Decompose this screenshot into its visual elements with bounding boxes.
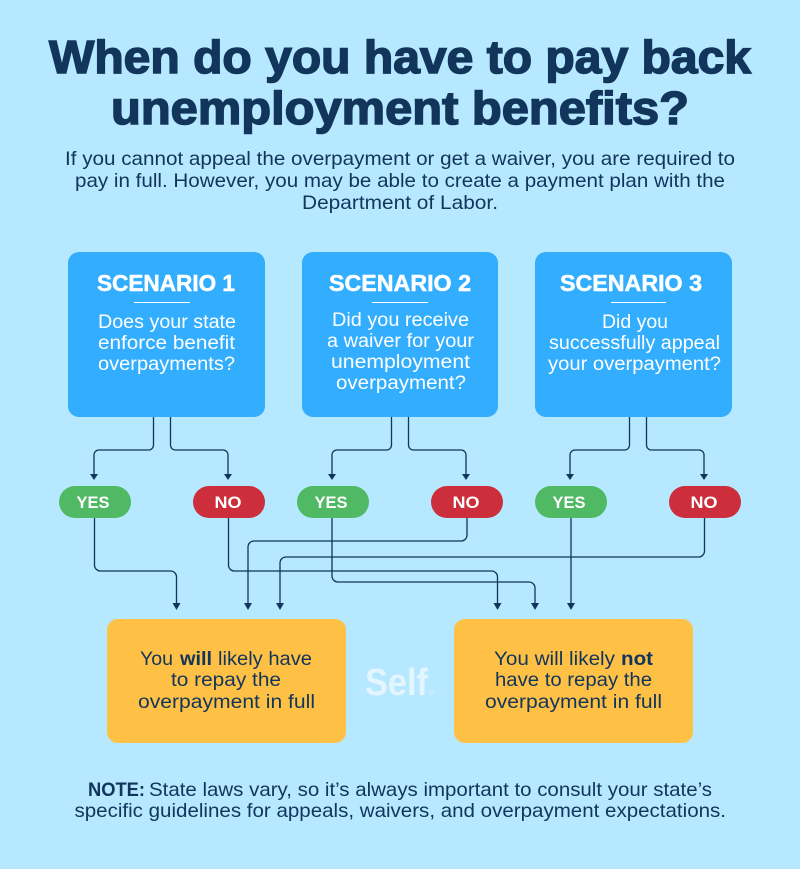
panel: scenario 2: unemployment [331,352,471,373]
outcome: will likely repay: to repay the [171,670,281,691]
outcome: will likely repay: overpayment in full [138,692,315,713]
outcome: will likely not repay: You will likely [494,649,616,670]
panel: scenario 3: successfully appeal [549,333,720,354]
outcome: will likely repay: You [140,649,173,670]
answer: scenario 2 no: NO [452,493,480,512]
intro text: Department of Labor. [302,192,498,214]
logo: Self: Self [365,662,428,704]
note [74,779,726,822]
answer: scenario 2 no [431,486,503,518]
panel: scenario 3: SCENARIO 3 [560,270,702,296]
panel: scenario 2: overpayment? [336,373,466,394]
answer: scenario 1 no [193,486,265,518]
panel: scenario 3: Did you [602,312,668,333]
arrows: answers to outcomes [94,518,704,610]
panel: scenario 2: SCENARIO 2 [329,270,471,296]
panel: scenario 1: SCENARIO 1 [97,270,235,296]
outcome: will likely repay: likely have [218,649,312,670]
answer: scenario 1 no: NO [214,493,242,512]
panel: scenario 1 [68,252,265,417]
outcome: will likely not repay: not [621,649,654,670]
panel: scenario 2 [302,252,498,417]
note: specific guidelines for appeals, waivers, and overpayment expectations. [74,800,726,822]
panel: scenario 3 [535,252,732,417]
outcome: will likely not repay: overpayment in full [485,692,662,713]
title: When do you have to pay back [49,31,751,83]
outcome: will likely not repay: have to repay the [495,670,652,691]
answer: scenario 3 yes: YES [552,493,586,512]
answer: scenario 2 yes [297,486,369,518]
panel: scenario 1: overpayments? [98,354,235,375]
outcome: will likely not repay [454,619,693,743]
intro text: If you cannot appeal the overpayment or get a waiver, you are required to [65,148,735,170]
title: unemployment benefits? [111,82,689,134]
title [49,31,751,134]
note: NOTE: [88,779,145,801]
answer: scenario 1 yes [59,486,131,518]
arrows: scenarios to answers [90,417,708,480]
panel: scenario 2: a waiver for your [327,331,475,352]
answer: scenario 2 yes: YES [314,493,348,512]
panel: scenario 2: Did you receive [332,310,469,331]
intro text [65,148,735,214]
answer: scenario 3 no: NO [690,493,718,512]
panel: scenario 1: Does your state [98,312,236,333]
answer: scenario 1 yes: YES [76,493,110,512]
panel: scenario 3: your overpayment? [548,354,721,375]
note: State laws vary, so it’s always important to consult your state’s [149,779,712,801]
answer: scenario 3 no [669,486,741,518]
panel: scenario 1: enforce benefit [98,333,236,354]
answer: scenario 3 yes [535,486,607,518]
outcome: will likely repay [107,619,346,743]
intro text: pay in full. However, you may be able to create a payment plan with the [75,170,725,192]
outcome: will likely repay: will [179,649,212,670]
